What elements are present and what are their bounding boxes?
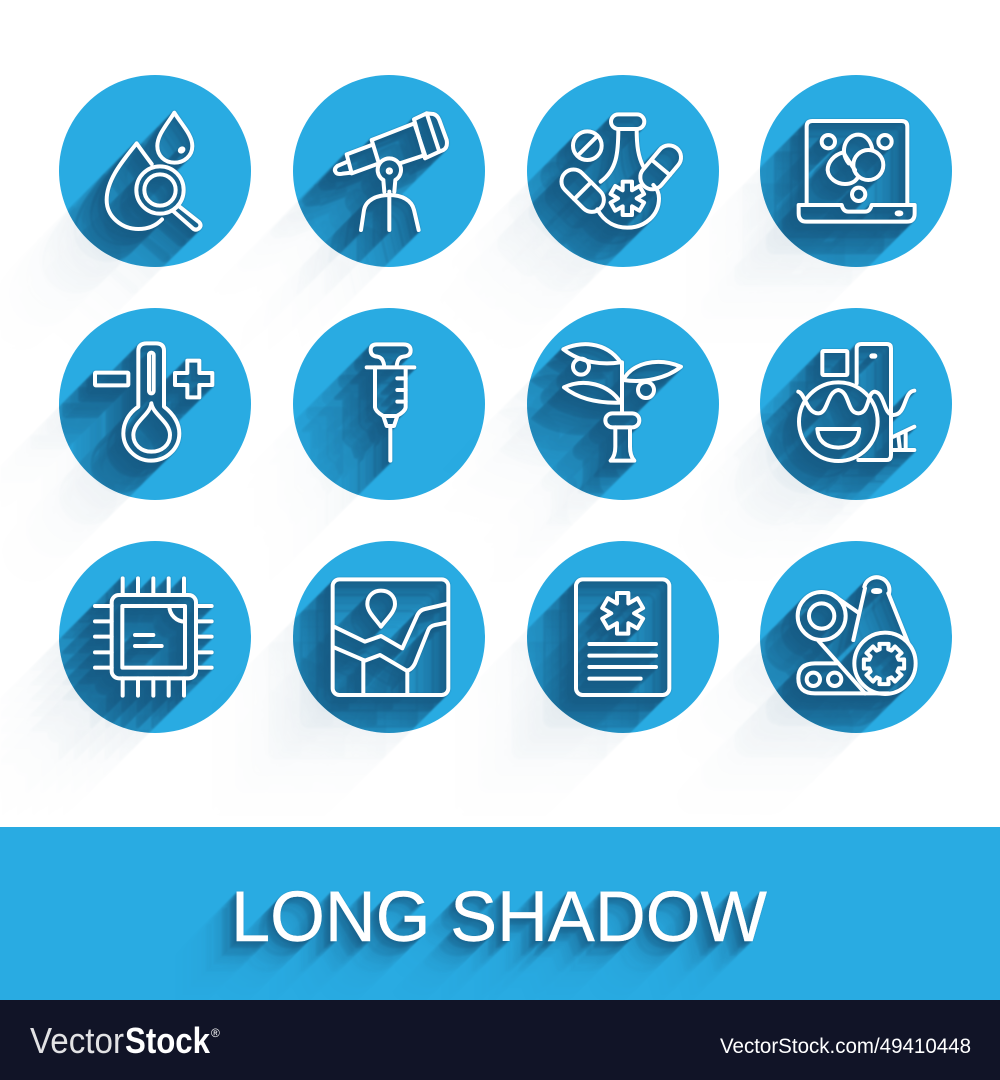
icon: belt drive with gear [798, 577, 916, 694]
panel: map badge [293, 541, 485, 733]
icon: syringe [367, 344, 414, 461]
icon: smiling face, refrigerator and wave [798, 344, 914, 461]
footer bar [0, 1000, 1000, 1080]
panel: syringe badge [293, 308, 485, 500]
panel: laptop badge [760, 75, 952, 267]
footer image id: VectorStock.com/49410448 [720, 1035, 971, 1058]
panel: processor chip badge [59, 541, 251, 733]
panel: plant badge [527, 308, 719, 500]
icon: medical document [576, 579, 669, 695]
icon: thermometer with minus and plus [95, 343, 212, 461]
footer logo: Stock [125, 1020, 211, 1061]
panel: medical document badge [527, 541, 719, 733]
panel: flask and pills badge [527, 75, 719, 267]
footer logo: ® [211, 1026, 220, 1040]
icon: flask with capsules [557, 114, 686, 228]
icon: water drops with magnifier [107, 113, 201, 230]
footer logo: Vector [30, 1020, 124, 1061]
icon: potted plant [563, 344, 681, 461]
icon: map with location pin [333, 579, 448, 695]
heading: long shadow: LONG SHADOW [231, 878, 767, 957]
panel: water drop search badge [59, 75, 251, 267]
icon: telescope on tripod [335, 113, 447, 230]
panel: thermometer badge [59, 308, 251, 500]
footer logo [30, 1020, 220, 1061]
icon: processor chip [95, 578, 212, 696]
panel: telescope badge [293, 75, 485, 267]
icon: laptop with molecules [799, 121, 915, 222]
panel: belt and gear badge [760, 541, 952, 733]
panel: appliances badge [760, 308, 952, 500]
banner [0, 827, 1000, 1000]
